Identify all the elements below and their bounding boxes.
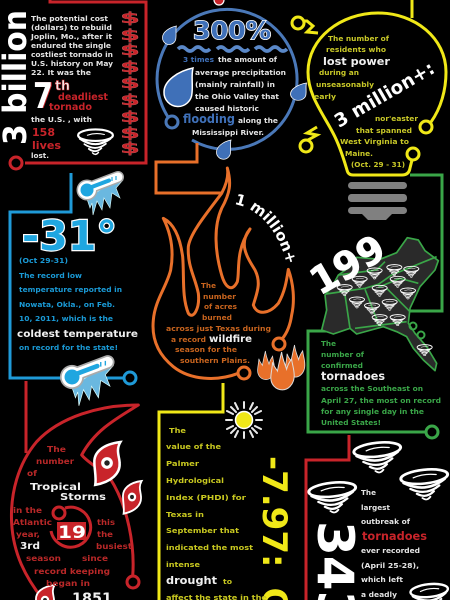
deadliest tornado label: tornado [49,102,92,113]
body text: season for the [175,346,237,354]
body text: of [27,469,38,478]
icon: dollar signs: $ [120,124,140,142]
body text: Texas in [166,511,204,519]
bulb base [348,182,407,220]
orange connector [156,143,222,193]
body text: early [314,93,336,101]
body text: number [203,293,237,301]
inner spiral [51,507,91,547]
rank: 7th [33,76,70,117]
icon: small flames [258,345,305,390]
body text: lost. [31,152,49,160]
body text: a record [171,336,206,344]
body text: which left [361,576,404,584]
body text: The [321,340,336,348]
body text: The [361,489,376,497]
body text [166,282,271,365]
icon: dollar signs: $ [120,91,140,109]
body text: intense [166,561,200,569]
blue connector line [10,173,124,378]
body text: since [82,554,109,563]
body text [166,427,267,600]
body text [361,489,420,599]
deadliest tornado label [32,92,108,152]
highlights: white labels [20,482,112,600]
panel: 1 million acres wildfire [152,143,306,390]
connector node [127,576,139,588]
body text: a deadly [361,591,397,599]
body text: temperature reported in [19,286,122,294]
icon: dollar signs: $ [120,9,140,27]
waves [178,47,287,51]
body text: the [97,530,114,539]
icon: dollar signs: $ [120,108,140,126]
deadliest tornado label: 158 [32,126,55,139]
body text: confirmed [321,362,363,370]
body text: southern Plains. [180,357,250,365]
body text: outbreak of [361,518,411,526]
body text: to [223,578,232,586]
body text [321,340,441,427]
body text: across just Texas during [166,325,271,333]
frame [308,331,426,432]
body text: United States! [321,419,381,427]
deadliest tornado label: lives [32,139,61,152]
panel: 199 tornadoes map [302,175,442,438]
highlights: 3 times and flooding: flooding [183,112,235,126]
body text: that spanned [356,127,412,135]
body text: April 27, the most on record [321,397,441,405]
map nodes [410,322,424,338]
highlights: 3 times and flooding [183,56,235,126]
body text [192,56,286,137]
body text: season [26,554,61,563]
icon: dollar signs: $ [120,41,140,59]
highlight: coldest temperature: coldest temperature [17,329,138,340]
body text: 10, 2011, which is the [19,315,113,323]
body text: largest [361,504,391,512]
panel: 3 million power loss bulb [292,0,446,220]
number badge: 19: 19 [58,523,86,543]
body text: (Oct. 29 - 31) [351,161,405,169]
hurricane outline [11,405,138,600]
map: southeast US [322,238,438,371]
body text: across the Southeast on [321,385,423,393]
big number: -31 degrees: -31° [22,212,117,260]
body text: Hydrological [166,477,224,485]
body text: September that [166,527,240,535]
inner node [53,507,65,519]
body text: (mainly rainfall) in [195,81,275,89]
body text: Joplin, Mo., after it [30,33,113,41]
icon: thermometer bottom [60,361,113,406]
body text: costliest tornado in [31,51,113,59]
body text: Index (PHDI) for [166,494,247,502]
body text: West Virginia to [340,138,409,146]
body text: ever recorded [361,547,420,555]
body text: indicated the most [166,544,254,552]
body text: (dollars) to rebuild [31,24,112,32]
deadliest tornado label: deadliest [58,92,108,103]
body text [19,257,122,352]
body text: The record low [19,272,83,280]
body text: The potential cost [31,15,109,23]
body text: The [169,427,186,435]
icon: dollar signs: $ [120,58,140,76]
connector nodes [292,17,432,160]
body text: The [201,282,216,290]
big number: 3 million+: 3 million+: [331,58,438,132]
big number: 300%: 300% [193,16,271,45]
body text: number of [321,351,365,359]
body text: The [47,445,67,454]
body text: for any single day in the [321,408,424,416]
body text: Mississippi River. [192,129,264,137]
connector node [10,157,22,169]
body text: value of the [166,443,221,451]
body text: The number of [328,35,390,43]
panel: 19 tropical storms [11,381,142,600]
highlight: tornadoes: tornadoes [321,369,385,383]
body text: unseasonably [316,81,374,89]
flame outline [153,168,293,378]
body text [30,15,113,160]
connector node [166,116,178,128]
rank: 7th: th [55,79,70,94]
body text: year, [16,530,40,539]
body text: burned [202,314,232,322]
body text: endured the single [31,42,111,50]
connector node [426,426,438,438]
icon: tornado [78,129,113,154]
body text: along the [238,117,278,125]
body text: record keeping [34,567,110,576]
icon: thermometer top [76,176,123,215]
icon: water drops [162,26,306,159]
body text: Maine. [345,150,373,158]
red connector line [25,0,146,163]
body text: average precipitation [195,69,286,77]
icon: dollar signs [120,9,140,157]
icon: hurricanes [36,442,142,600]
body text [13,445,132,588]
panel: 1 million acres wildfire: 1 million+ [236,194,295,262]
red connector [24,381,28,453]
body text: began in [46,579,90,588]
body text: Palmer [166,460,200,468]
body text: in the [13,506,43,515]
highlight: tornadoes: tornadoes [362,529,427,543]
panel: 343 tornado outbreak [306,435,450,600]
body text: (April 25-28), [361,562,419,570]
body text: residents who [326,46,386,54]
highlight: lost power: lost power [323,55,391,68]
body text: number [36,457,74,466]
icon: dollar signs: $ [120,74,140,92]
rank: 7th: 7 [33,76,53,117]
body text: U.S. history on May [31,60,113,68]
body text [314,35,419,169]
icon: small tornadoes [337,265,432,356]
body text: the U.S. , with [31,116,92,124]
icon: dollar signs: $ [120,26,140,44]
body text: Nowata, Okla., on Feb. [19,301,115,309]
body text: of acres [204,303,237,311]
body text: on record for the state! [19,344,118,352]
icon: dollar signs: $ [120,139,140,157]
body text: (Oct 29-31) [19,257,68,265]
body text: the Ohio Valley that [195,93,280,101]
body text: caused historic [195,105,259,113]
body text: this [97,518,115,527]
body text: 22. It was the [31,69,91,77]
panel: 300% flooding [157,0,306,159]
connector nodes [238,338,285,379]
icon: sun [226,402,262,438]
highlight: drought: drought [166,575,217,587]
bulb outline [308,0,446,175]
body text: Atlantic [13,518,52,527]
body text: during an [319,69,359,77]
panel: -31 degree record low [10,173,138,406]
icon: large tornadoes [308,440,450,600]
body text: nor'easter [375,115,419,123]
circle outline [157,9,297,149]
panel: -7.97 PHDI drought [159,383,294,600]
big number: 1 million+ on a curve [234,204,288,268]
top marker [214,0,224,5]
body text: busiest [96,542,132,551]
highlight: wildfire: wildfire [209,334,252,345]
panel: 3 billion tornado cost [0,0,146,169]
big number: 199: 199 [302,226,393,304]
highlights: 3 times and flooding: 3 times [183,56,214,64]
yellow connector [159,383,223,600]
highlights: white labels: 3rd [20,541,40,552]
green connector [410,175,442,311]
rank: 7th: 7 [34,76,54,117]
connector node [124,372,136,384]
highlights: white labels: Tropical [30,482,81,493]
body text: the amount of [218,56,278,64]
red connector [306,435,349,600]
highlights: white labels: Storms [60,492,106,503]
